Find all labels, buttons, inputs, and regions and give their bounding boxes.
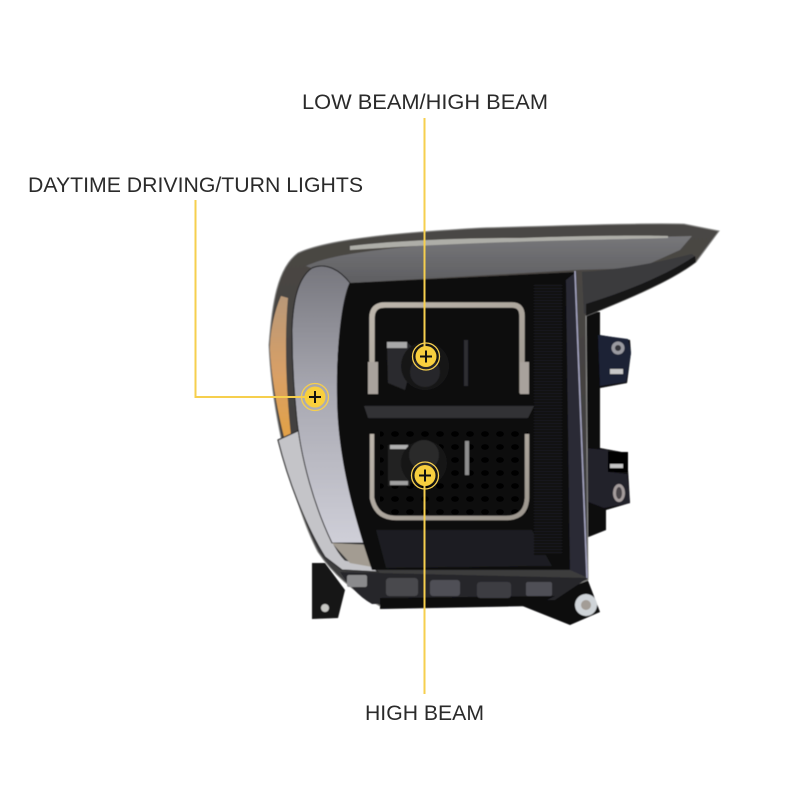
upper lens frame <box>372 305 522 393</box>
daytime running light band <box>292 266 370 543</box>
lower trim panel <box>376 530 552 568</box>
marker <box>412 462 438 489</box>
ribbed lower lens edge <box>582 254 696 314</box>
clear right edge <box>566 272 588 578</box>
right edge highlight <box>575 271 587 578</box>
right mounting brackets <box>580 312 631 538</box>
headlight assembly <box>269 224 719 625</box>
upper frame interior <box>377 310 519 402</box>
silver DRL end piece <box>332 543 378 568</box>
bottom bracket with washer <box>515 578 600 625</box>
lower lens texture <box>380 425 528 517</box>
callout: low beam / high beam <box>302 91 548 370</box>
marker <box>412 343 440 370</box>
amber side marker <box>270 296 293 455</box>
label: daytime driving / turn lights: DAYTIME DRIVING/TURN LIGHTS <box>28 174 363 197</box>
ribbed column <box>534 285 562 555</box>
leader line <box>424 118 426 356</box>
bottom light strip <box>340 572 588 609</box>
upper frame end tabs <box>368 362 529 394</box>
callout: high beam <box>365 462 484 725</box>
label: low beam / high beam: LOW BEAM/HIGH BEAM <box>302 91 548 114</box>
label: high beam: HIGH BEAM <box>365 702 484 725</box>
middle textured bar <box>364 406 534 418</box>
top reflector strip <box>350 236 668 250</box>
left mounting bracket <box>312 563 345 619</box>
lower lens frame <box>372 434 527 518</box>
callout: daytime driving / turn lights <box>28 174 363 410</box>
top lens band <box>306 236 692 283</box>
upper projector <box>387 340 468 390</box>
outer lens <box>269 224 719 606</box>
lower projector <box>388 440 469 486</box>
lens underside shadow <box>586 256 696 316</box>
clear side rim <box>278 430 378 572</box>
marker <box>302 384 328 410</box>
black main housing <box>337 272 583 570</box>
leader line <box>196 200 315 397</box>
leader line <box>424 476 426 694</box>
